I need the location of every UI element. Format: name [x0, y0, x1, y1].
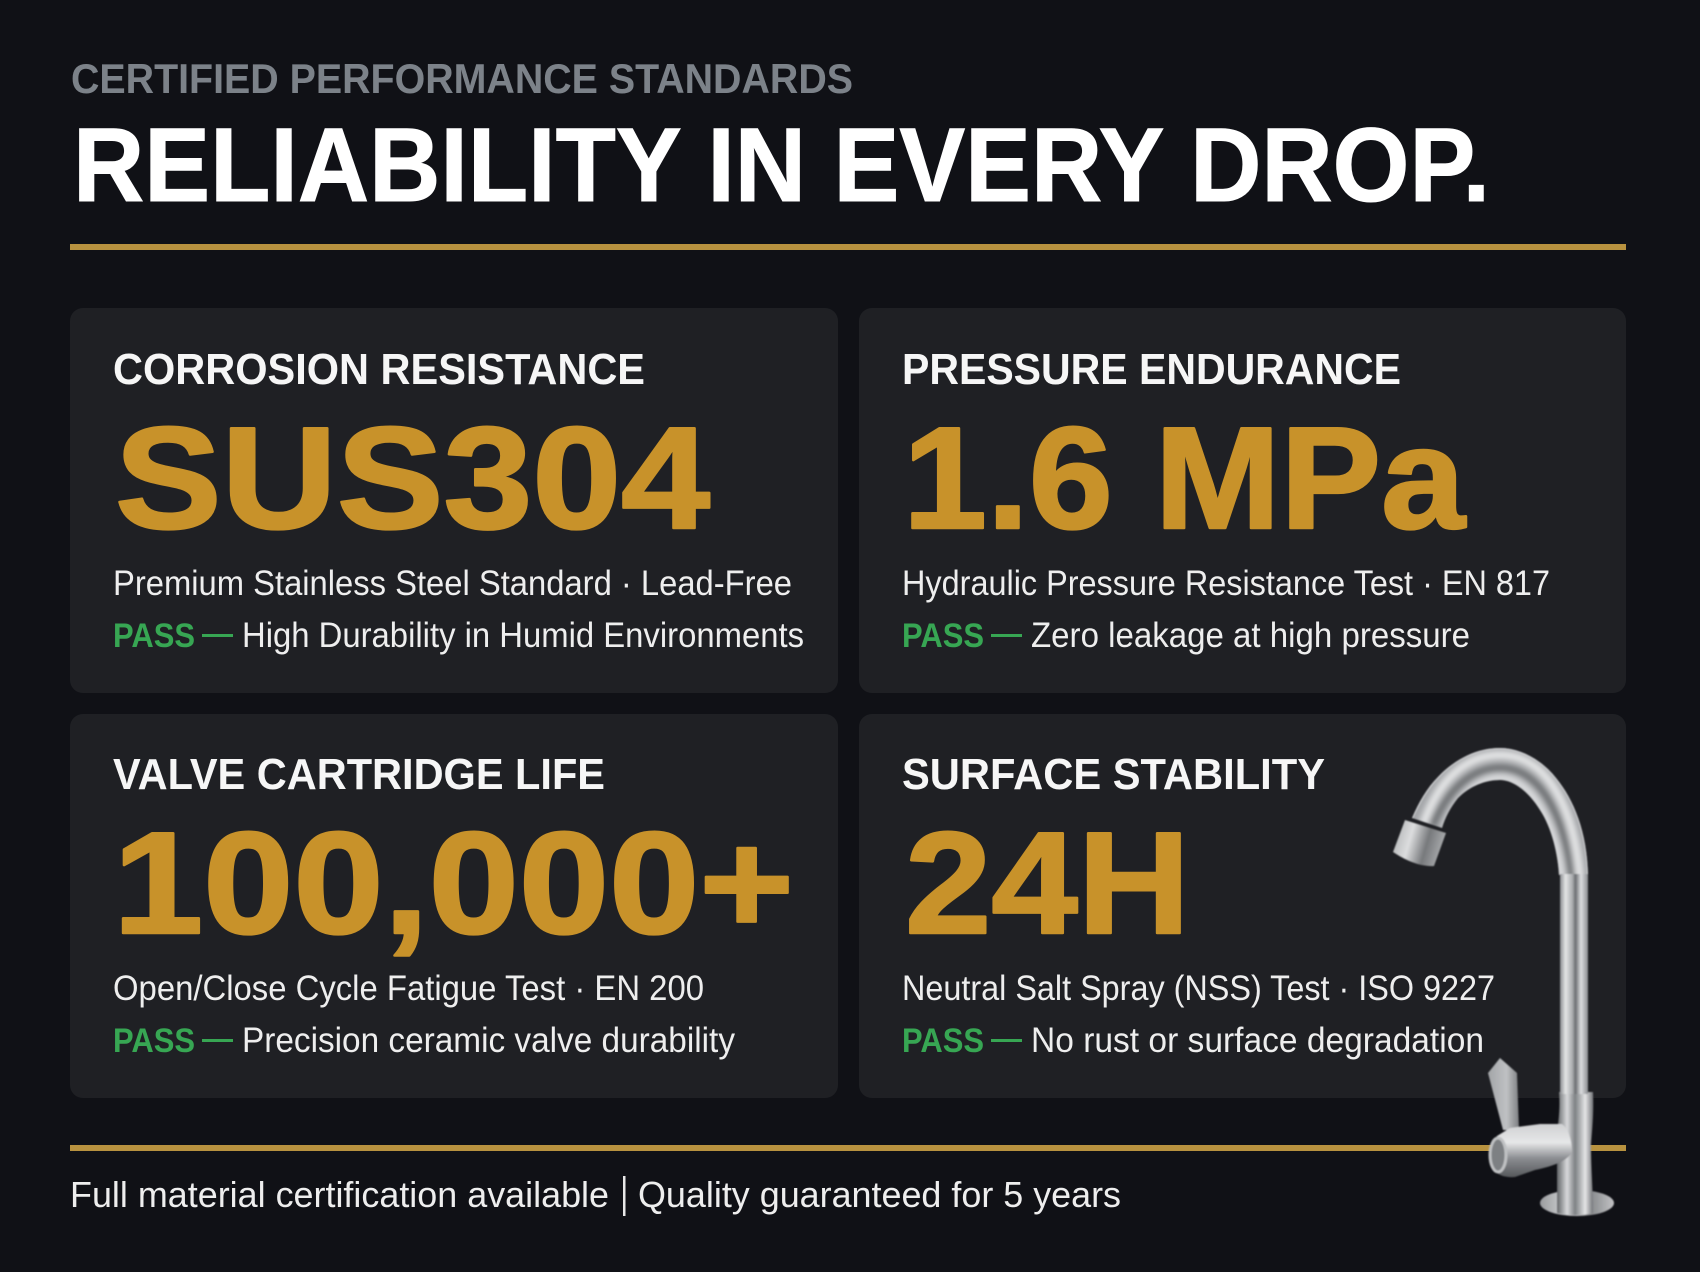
result: pass leakage: PASS	[902, 617, 984, 655]
metric: 100,000+: 100,000+	[113, 802, 794, 964]
faucet lever handle	[1488, 1058, 1519, 1130]
heading: surface stability: SURFACE STABILITY	[902, 750, 1325, 799]
footer note	[70, 1174, 1121, 1216]
heading: valve cartridge life: VALVE CARTRIDGE LIFE	[113, 750, 605, 799]
faucet valve cap	[1490, 1138, 1506, 1172]
result: pass durability: PASS	[113, 617, 195, 655]
panel: valve cartridge life	[70, 714, 838, 1098]
metric: SUS304: SUS304	[115, 397, 710, 559]
metric: 1.6 MPa: 1.6 MPa	[903, 397, 1466, 559]
faucet nozzle	[1393, 820, 1446, 866]
result: pass durability: High Durability in Humid Environments	[242, 616, 804, 655]
result: pass valve: PASS	[113, 1022, 195, 1060]
description: stainless steel: Premium Stainless Steel Standard · Lead-Free	[113, 564, 792, 603]
faucet valve body	[1490, 1124, 1572, 1177]
description: hydraulic test: Hydraulic Pressure Resistance Test · EN 817	[902, 564, 1550, 603]
icon: chrome faucet	[1393, 740, 1614, 1216]
faucet spout arc	[1411, 747, 1589, 876]
faucet base plate	[1540, 1190, 1614, 1216]
heading: pressure endurance: PRESSURE ENDURANCE	[902, 345, 1401, 394]
title: RELIABILITY IN EVERY DROP.	[73, 107, 1490, 224]
faucet collar	[1557, 1092, 1593, 1215]
faucet stem	[1560, 874, 1588, 1094]
footer note: Full material certification available	[70, 1174, 609, 1215]
panel: surface stability	[859, 714, 1626, 1098]
panel: corrosion resistance	[70, 308, 838, 693]
eyebrow heading: CERTIFIED PERFORMANCE STANDARDS	[71, 55, 853, 102]
result: pass rust: PASS	[902, 1022, 984, 1060]
description: salt spray: Neutral Salt Spray (NSS) Test · ISO 9227	[902, 969, 1495, 1008]
result: pass leakage: Zero leakage at high pressure	[1031, 616, 1470, 655]
footer note: Quality guaranteed for 5 years	[638, 1174, 1121, 1215]
metric: 24H: 24H	[905, 802, 1190, 964]
result: pass valve: Precision ceramic valve durability	[242, 1021, 735, 1060]
description: cycle fatigue: Open/Close Cycle Fatigue Test · EN 200	[113, 969, 704, 1008]
result: pass rust: No rust or surface degradation	[1031, 1021, 1484, 1060]
panel: pressure endurance	[859, 308, 1626, 693]
heading: corrosion resistance: CORROSION RESISTANCE	[113, 345, 645, 394]
